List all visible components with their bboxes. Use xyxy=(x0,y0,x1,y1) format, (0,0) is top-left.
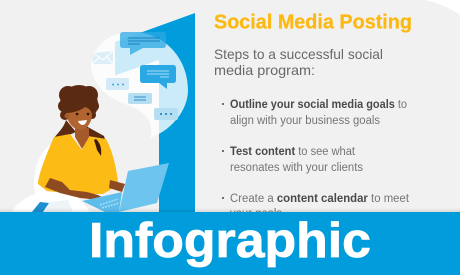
banner heading: Infographic xyxy=(89,214,371,268)
speech bubble xyxy=(91,32,188,138)
white blob behind person xyxy=(12,143,90,212)
bullet: outline goals xyxy=(222,99,407,127)
bullet: content calendar xyxy=(222,193,410,220)
bullet: test content xyxy=(222,146,363,174)
icon: typing bubble right xyxy=(154,108,178,120)
arm xyxy=(45,178,105,203)
title: Social Media Posting xyxy=(214,12,412,34)
bullet: content calendar: Create a content calendar to meet xyxy=(230,193,410,205)
banner xyxy=(0,212,460,275)
bullet: test content: Test content to see what xyxy=(230,146,356,158)
blue door panel xyxy=(115,13,195,212)
intro text: Steps to a successful social xyxy=(214,46,383,62)
blouse xyxy=(38,134,118,194)
icon: chat message top xyxy=(120,32,166,55)
intro text xyxy=(214,46,383,78)
smile xyxy=(78,120,87,125)
ear xyxy=(64,114,70,118)
bullet: outline goals: align with your business goals xyxy=(230,115,380,127)
banner shadow xyxy=(0,208,460,212)
illustration: woman at laptop xyxy=(38,85,125,203)
eyes xyxy=(77,113,88,115)
laptop xyxy=(82,163,169,212)
hair xyxy=(53,85,106,142)
bullet: content calendar: your goals xyxy=(230,208,282,220)
braid xyxy=(94,139,101,156)
bullet: test content: resonates with your clients xyxy=(230,162,363,174)
face xyxy=(66,107,92,130)
icon: chat message right xyxy=(140,65,176,89)
intro text: media program: xyxy=(214,62,315,78)
icon: small text bubble xyxy=(128,93,152,104)
icon: envelope xyxy=(92,51,113,64)
icon: typing bubble left xyxy=(106,78,129,90)
bullet: outline goals: Outline your social media goals to xyxy=(230,99,407,111)
neck xyxy=(75,128,89,149)
right hand xyxy=(109,180,125,192)
phone and papers xyxy=(32,200,73,212)
